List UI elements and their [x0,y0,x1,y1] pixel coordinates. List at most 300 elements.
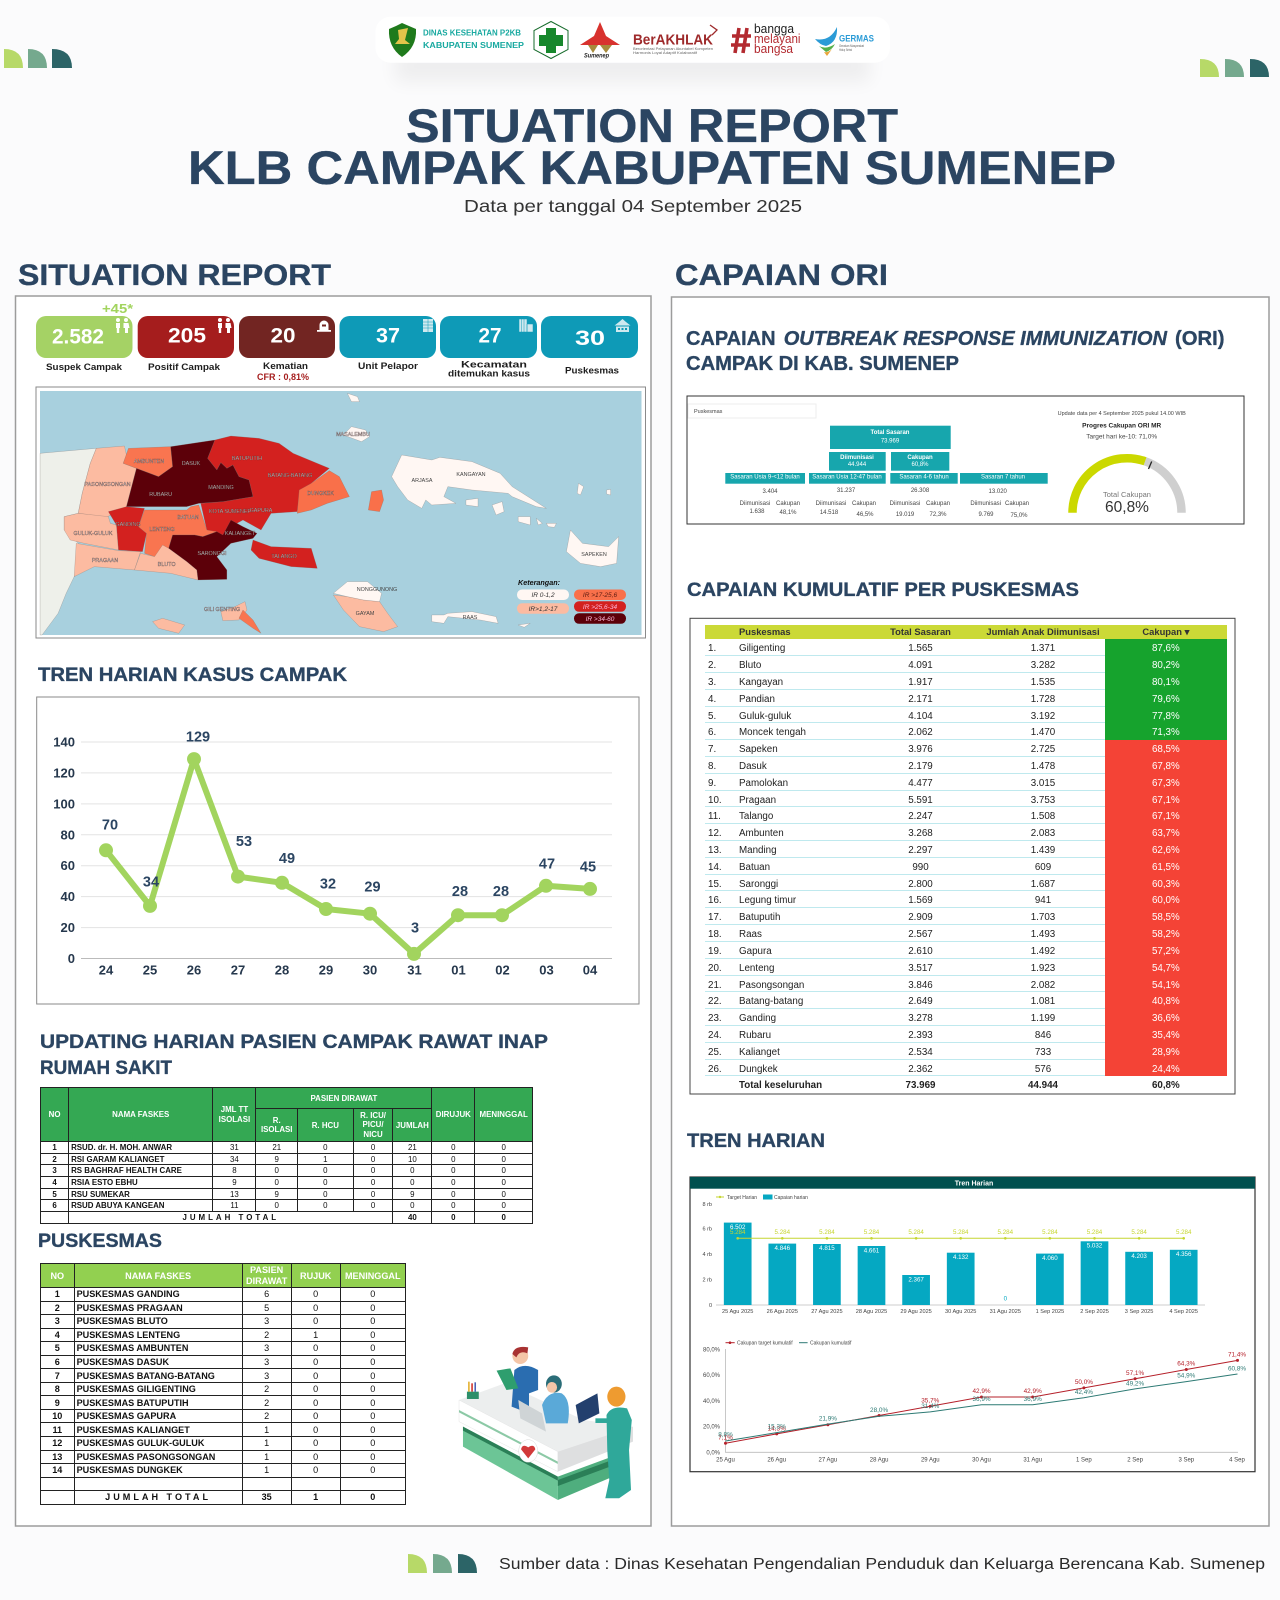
table: cumulative coverage per puskesmas: 5.591 [908,795,933,806]
map: district labels [74,432,607,621]
table: puskesmas patients: 0 [370,1411,375,1421]
table: cumulative coverage per puskesmas: Kalianget [739,1047,780,1058]
chart: x axis: 01 [451,962,466,978]
table: cumulative coverage per puskesmas: 2.171 [908,694,933,705]
chart: data labels: 45 [580,859,596,875]
line series: target kumulatif: 50,0% [1075,1379,1093,1386]
table: puskesmas patients: PUSKESMAS LENTENG [77,1330,180,1340]
table: puskesmas patients: 9 [55,1398,60,1408]
chart: y axis: 60 [61,858,75,873]
dashboard: age group 7 tahun: Diimunisasi [970,501,1001,507]
map: district labels: RAAS [463,615,478,621]
logo: BerAKHLAK [633,25,717,55]
chart: x axis: 26 [187,962,201,978]
bar chart axes: 26 Agu 2025 [767,1309,798,1315]
logo text: Dinas Kesehatan: DINAS KESEHATAN P2KB [423,28,521,38]
heading: situation report: SITUATION REPORT [18,259,331,292]
table: puskesmas patients: 0 [313,1465,318,1475]
table: cumulative coverage per puskesmas: 16. [708,895,722,906]
table: cumulative coverage per puskesmas: 25. [708,1047,722,1058]
table: cumulative coverage per puskesmas: Batuputih [739,912,780,923]
table: hospital inpatient updates: 0 [323,1178,328,1187]
table: hospital inpatient updates: RSU SUMEKAR [71,1190,130,1199]
title [188,100,1116,195]
logo bar shadow [395,50,870,82]
bar chart axes: 28 Agu 2025 [856,1309,887,1315]
line series: target kumulatif: 35,7% [921,1398,940,1404]
line series: cakupan kumulatif: 28,0% [870,1407,888,1414]
logo: bangga melayani bangsa: melayani [754,32,800,46]
table: puskesmas patients: 3 [55,1316,60,1326]
table: cumulative coverage per puskesmas: 1.478 [1031,761,1055,772]
table: cumulative coverage per puskesmas: 18. [708,929,722,940]
dashboard: update note: Progres Cakupan ORI MR [1082,422,1162,430]
line chart: daily measles cases [37,697,639,1004]
table: hospital inpatient updates: 0 [501,1190,506,1199]
table: hospital inpatient updates: 0 [451,1190,456,1199]
table: puskesmas patients: NAMA FASKES [125,1270,191,1280]
map: district labels: BATUPUTIH [232,456,262,462]
line chart axes: 60,0% [703,1373,721,1379]
table: puskesmas patients: PUSKESMAS BATANG-BATANG [77,1371,215,1381]
table: cumulative coverage per puskesmas: 12. [708,828,722,839]
line series: target kumulatif: 42,9% [972,1388,991,1395]
table: hospital inpatient updates: 0 [275,1178,279,1187]
table: cumulative coverage per puskesmas: 2.297 [908,845,933,856]
line chart axes: 27 Agu [819,1458,837,1464]
chart: x axis: 24 [99,962,114,978]
table: cumulative coverage per puskesmas: 941 [1035,895,1051,906]
table: hospital inpatient updates: 0 [371,1190,375,1199]
chart: x axis: 03 [539,962,554,978]
table: hospital inpatient updates: R. ICU/ [360,1111,386,1120]
table: puskesmas patients: 8 [55,1384,60,1394]
table: cumulative coverage per puskesmas: 40,8% [1152,996,1180,1007]
logo: GERMAS [815,27,874,56]
dashboard: puskesmas dropdown [688,404,816,418]
table: cumulative coverage per puskesmas: 990 [912,862,929,873]
KPI: suspek campak: 2.582 [52,326,104,348]
table: cumulative coverage per puskesmas: 10. [708,795,722,806]
bar value labels: 4.203 [1131,1253,1147,1260]
table: puskesmas patients: 5 [55,1343,60,1353]
line chart axes: 1 Sep [1076,1458,1092,1464]
line series: cakupan kumulatif: 31,4% [921,1403,940,1410]
heading: updating harian pasien rawat inap [40,1031,548,1079]
chart: data labels: 3 [411,921,419,937]
table: puskesmas patients: 0 [370,1357,375,1367]
logo: Puskesmas hexagon [534,22,568,58]
table: hospital inpatient updates: 10 [408,1155,417,1164]
dashboard: age group 7 tahun [960,473,1048,519]
chart: y axis: 140 [53,734,75,750]
bar chart axes: 4 rb [703,1252,712,1258]
table: cumulative coverage per puskesmas [705,625,1227,1091]
table: hospital inpatient updates: NAMA FASKES [112,1110,169,1119]
table: cumulative coverage per puskesmas: 3.015 [1031,778,1055,789]
logo text: Dinas Kesehatan: KABUPATEN SUMENEP [423,41,525,50]
map: district labels: LENTENG [149,527,175,533]
table: cumulative coverage per puskesmas: 57,2% [1152,946,1180,957]
line series: cakupan kumulatif: 49,2% [1126,1380,1144,1388]
table: cumulative coverage per puskesmas: 1. [708,643,716,654]
dashboard: age group 4-6 tahun: Sasaran 4-6 tahun [899,474,949,480]
table: hospital inpatient updates: R. HCU [312,1120,339,1130]
chart: y axis: 100 [53,796,75,811]
KPI: positif campak [138,316,234,373]
table: cumulative coverage per puskesmas: 1.508 [1031,811,1055,822]
table: puskesmas patients: 13 [52,1452,62,1462]
dashboard: total sasaran box: Total Sasaran [871,430,910,436]
table: cumulative coverage per puskesmas: Batuan [739,862,770,873]
chart: y axis: 40 [61,889,75,904]
chart: x axis: 30 [363,962,377,978]
table: cumulative coverage per puskesmas: Raas [739,929,762,940]
table: puskesmas patients: PUSKESMAS BATUPUTIH [77,1398,189,1408]
dashboard: total sasaran box: 73.969 [881,438,900,444]
dashboard: age group 9-12 bulan: 1.638 [749,509,765,515]
table: cumulative coverage per puskesmas: 22. [708,996,722,1007]
table: puskesmas patients: PUSKESMAS PASONGSONGAN [77,1452,215,1462]
table: cumulative coverage per puskesmas: 44.944 [1028,1080,1058,1091]
table: hospital inpatient updates: 4 [52,1178,57,1187]
dashboard: update note [1058,411,1186,440]
line chart axes: 26 Agu [767,1458,786,1464]
table: cumulative coverage per puskesmas: 1.199 [1031,1013,1055,1024]
line series: cakupan kumulatif: 54,9% [1177,1372,1196,1380]
table: cumulative coverage per puskesmas: 87,6% [1152,643,1180,654]
table: cumulative coverage per puskesmas: 4.091 [908,660,933,671]
table: puskesmas patients: 0 [370,1371,375,1381]
table: cumulative coverage per puskesmas: 3. [708,677,716,688]
KPI: suspek campak: Suspek Campak [46,362,123,373]
table: puskesmas patients: 3 [264,1357,269,1367]
chart: x axis: 25 [143,962,157,978]
table: puskesmas patients: 0 [313,1438,318,1448]
chart: x axis: 29 [319,962,333,978]
chart: y axis: 20 [61,920,75,935]
table: cumulative coverage per puskesmas: 63,7% [1152,828,1180,839]
dashboard: age group 9-12 bulan: 48,1% [779,510,797,516]
line series: cakupan kumulatif: 15,3% [768,1424,786,1430]
table: hospital inpatient updates: 0 [323,1201,328,1210]
dashboard: update note: Target hari ke-10: 71,0% [1086,434,1157,440]
decoration: top right leaves [1200,59,1269,77]
bar chart axes: 2 rb [703,1278,712,1284]
illustration: monitors [518,1400,546,1432]
table: cumulative coverage per puskesmas: 2.567 [908,929,933,940]
table: hospital inpatient updates: 0 [371,1178,375,1187]
table: puskesmas patients: 1 [264,1452,269,1462]
dashboard: age group 4-6 tahun: Cakupan [926,501,950,507]
illustration: desk front [459,1400,633,1500]
map: district labels: MASALEMBU [336,432,370,438]
table: cumulative coverage per puskesmas: Cakupan ▾ [1142,626,1189,637]
table: hospital inpatient updates: 1 [323,1155,328,1164]
map: district labels: SARONGGI [197,551,227,557]
bar chart legend: Target Harian [727,1195,757,1201]
map: district labels: GULUK-GULUK [74,531,113,537]
frame: cumulative table [690,618,1235,1094]
chart: x axis: 04 [583,962,598,978]
table: cumulative coverage per puskesmas: 1.535 [1031,677,1055,688]
table: puskesmas patients: 0 [370,1316,375,1326]
KPI: unit pelapor: Unit Pelapor [358,361,418,372]
chart: x axis: 31 [407,962,422,978]
table: hospital inpatient updates: 0 [501,1166,506,1175]
line chart axes [703,1348,1245,1464]
dashboard: ORI coverage summary [687,396,1244,524]
table: cumulative coverage per puskesmas: 24. [708,1030,722,1041]
table: cumulative coverage per puskesmas: 35,4% [1152,1030,1180,1041]
table: cumulative coverage per puskesmas: Puskesmas [739,626,791,637]
bar chart axes: 31 Agu 2025 [990,1309,1021,1315]
map: district labels: PRAGAAN [92,558,118,564]
map: district labels: SAPEKEN [581,552,607,558]
table: hospital inpatient updates: 9 [275,1190,279,1199]
table: puskesmas patients: 0 [313,1316,318,1326]
table: cumulative coverage per puskesmas: 68,5% [1152,744,1180,755]
table: cumulative coverage per puskesmas: 1.923 [1031,963,1055,974]
chart: y axis: 80 [61,827,75,842]
heading: capaian ori: CAPAIAN ORI [675,259,888,292]
bar chart axes [703,1202,1205,1315]
map: district labels: BLUTO [158,562,176,568]
table: cumulative coverage per puskesmas: Legung timur [739,895,796,906]
dashboard: age group 9-12 bulan [725,473,805,516]
table: hospital inpatient updates: 21 [408,1143,417,1152]
bar value labels: 0 [1004,1296,1008,1302]
line chart axes: 40,0% [703,1399,721,1405]
table: puskesmas patients: 2 [264,1398,269,1408]
table: cumulative coverage per puskesmas: 24,4% [1152,1064,1180,1075]
bar chart legend: Capaian harian [774,1195,808,1201]
table: cumulative coverage per puskesmas: 36,6% [1152,1013,1180,1024]
table: cumulative coverage per puskesmas: 3.282 [1031,660,1055,671]
target line: 5.284 [1176,1229,1192,1236]
table: hospital inpatient updates: 40 [408,1213,417,1222]
map: district labels: NONGGUNONG [357,587,397,593]
table: cumulative coverage per puskesmas: 67,1% [1152,795,1180,806]
table: hospital inpatient updates: 11 [230,1201,239,1210]
table: puskesmas patients: PUSKESMAS BLUTO [77,1316,168,1326]
table: puskesmas patients: 6 [55,1357,60,1367]
table: cumulative coverage per puskesmas: 3.976 [908,744,933,755]
KPI: kecamatan ditemukan kasus: Kecamatan [461,360,527,370]
dashboard: tren harian charts [690,1177,1255,1472]
bar chart axes: 25 Agu 2025 [722,1309,753,1315]
table: puskesmas patients: 0 [313,1371,318,1381]
table: hospital inpatient updates: JML TT [221,1105,248,1114]
table: hospital inpatient updates: 1 [52,1143,57,1152]
logo: bangga melayani bangsa: bangsa [754,42,793,56]
chart: data labels: 32 [320,877,336,893]
bar chart axes: 1 Sep 2025 [1036,1309,1064,1315]
table: cumulative coverage per puskesmas: 23. [708,1013,722,1024]
map: district labels: GANDING [115,522,141,528]
dashboard: age group 9-12 bulan: Diimunisasi [740,501,770,507]
table: cumulative coverage per puskesmas: Lenteng [739,963,774,974]
chart: data labels [102,730,596,937]
table: cumulative coverage per puskesmas: 3.846 [908,980,933,991]
map: district labels: DUNGKEK [307,491,334,497]
table: hospital inpatient updates: R. [273,1116,281,1125]
table: puskesmas patients: 0 [370,1465,375,1475]
dashboard: coverage gauge [1072,458,1182,516]
line series: target kumulatif: 42,9% [1024,1388,1042,1395]
table: puskesmas patients: PUSKESMAS DUNGKEK [77,1465,183,1475]
table: cumulative coverage per puskesmas: 1.470 [1031,727,1055,738]
bar chart axes: 30 Agu 2025 [945,1309,976,1315]
line chart axes: 0,0% [706,1450,721,1456]
table: puskesmas patients: 4 [55,1330,60,1340]
chart: y axis: 120 [53,765,75,780]
table: cumulative coverage per puskesmas: Giligenting [739,643,785,654]
KPI: unit pelapor [340,316,436,372]
line series: target kumulatif [718,1352,1246,1445]
table: cumulative coverage per puskesmas: 21. [708,980,722,991]
target line: 5.284 [1042,1229,1058,1236]
map: district labels: RUBARU [149,492,172,498]
title: KLB CAMPAK KABUPATEN SUMENEP [188,142,1116,195]
KPI: unit pelapor: 37 [376,324,400,348]
line chart axes: 20,0% [703,1425,721,1431]
table: puskesmas patients: 0 [370,1398,375,1408]
dashboard: diimunisasi box: Diimunisasi [840,455,874,461]
KPI: puskesmas: Puskesmas [565,366,619,376]
dashboard: age group 9-12 bulan: 3.404 [762,489,778,495]
chart: data labels: 29 [364,880,381,896]
table: cumulative coverage per puskesmas: 20. [708,963,722,974]
table: puskesmas patients: PUSKESMAS GANDING [77,1289,180,1299]
table: cumulative coverage per puskesmas: 4. [708,694,716,705]
table: puskesmas patients: 10 [52,1411,62,1421]
line series: cakupan kumulatif: 36,9% [1024,1396,1042,1403]
dashboard: age group 12-47 bulan: Cakupan [852,501,876,507]
chart: x axis: 02 [495,962,510,978]
table: cumulative coverage per puskesmas: 67,1% [1152,811,1180,822]
table: hospital inpatient updates: 0 [501,1213,506,1222]
line chart axes: 25 Agu [716,1458,735,1464]
KPI: kecamatan ditemukan kasus: 27 [478,324,502,348]
line series: target kumulatif: 64,3% [1177,1360,1196,1368]
map: legend: Keterangan: [518,578,560,587]
chart: data labels: 49 [279,851,295,867]
subtitle: report date: Data per tanggal 04 September 2025 [464,196,802,216]
table: cumulative coverage per puskesmas: 54,1% [1152,980,1180,991]
table: puskesmas patients: DIRAWAT [246,1276,287,1286]
table: cumulative coverage per puskesmas: 79,6% [1152,694,1180,705]
chart: y axis: 0 [68,951,75,966]
table: cumulative coverage per puskesmas: 2.362 [908,1064,933,1075]
table: cumulative coverage per puskesmas: 61,5% [1152,862,1180,873]
table: hospital inpatient updates: 0 [501,1143,506,1152]
table: puskesmas patients: 2 [264,1330,269,1340]
bar value labels: 6.502 [730,1224,746,1231]
table: cumulative coverage per puskesmas: Jumlah Anak Diimunisasi [986,626,1100,637]
logo: bangga melayani bangsa: bangga [754,22,794,36]
table: cumulative coverage per puskesmas: 1.565 [908,643,933,654]
table: hospital inpatient updates: 0 [451,1166,456,1175]
heading: updating harian pasien rawat inap: UPDATING HARIAN PASIEN CAMPAK RAWAT INAP [40,1031,548,1053]
dashboard: age group 4-6 tahun: 19.019 [896,512,915,518]
dashboard: age group 4-6 tahun: Diimunisasi [890,501,920,507]
map: district labels: ARJASA [412,478,433,484]
table: cumulative coverage per puskesmas: Bluto [739,660,761,671]
table: cumulative coverage per puskesmas: 28,9% [1152,1047,1180,1058]
table: puskesmas patients: 2 [264,1384,269,1394]
map: district labels: GAPURA [250,508,273,514]
table: cumulative coverage per puskesmas: 60,0% [1152,895,1180,906]
table: cumulative coverage per puskesmas: 6. [708,727,716,738]
heading: capaian ori campak: OUTBREAK RESPONSE IMMUNIZATION [784,327,1168,350]
chart: x axis: 27 [231,962,245,978]
line series: cakupan kumulatif [718,1366,1246,1441]
table: puskesmas patients: PUSKESMAS GILIGENTING [77,1384,196,1394]
line series: target kumulatif: 57,1% [1126,1370,1144,1377]
KPI: suspek campak [36,302,133,373]
logo text: Dinas Kesehatan [423,28,525,50]
table: cumulative coverage per puskesmas: 2.725 [1031,744,1055,755]
table: cumulative coverage per puskesmas: 1.492 [1031,946,1055,957]
table: puskesmas patients: 0 [370,1289,375,1299]
target line: 5.284 [864,1229,880,1236]
chart: data labels: 70 [102,818,118,834]
table: puskesmas patients: 0 [370,1384,375,1394]
heading: capaian kumulatif per puskesmas: CAPAIAN KUMULATIF PER PUSKESMAS [687,579,1079,601]
table: cumulative coverage per puskesmas: Ambunten [739,828,784,839]
table: cumulative coverage per puskesmas: Moncek tengah [739,727,806,738]
table: cumulative coverage per puskesmas: Manding [739,845,777,856]
table: hospital inpatient updates: 8 [232,1166,237,1175]
illustration: seated nurse [542,1375,569,1423]
illustration: medical reception desk with staff [459,1347,633,1500]
table: hospital inpatient updates: 0 [451,1201,456,1210]
line series: target kumulatif: 14,3% [768,1426,786,1432]
table: cumulative coverage per puskesmas: 1.371 [1031,643,1055,654]
heading: updating harian pasien rawat inap: RUMAH SAKIT [40,1057,172,1079]
map: legend: IR >34-60 [586,616,615,623]
map: district labels: KOTA SUMENEP [209,509,251,515]
table: cumulative coverage per puskesmas: Pragaan [739,795,776,806]
bar chart axes: 3 Sep 2025 [1125,1309,1153,1315]
table: puskesmas patients: 0 [370,1303,375,1313]
table: puskesmas patients: 5 [264,1303,269,1313]
table: cumulative coverage per puskesmas: 1.703 [1031,912,1055,923]
table: hospital inpatient updates: 9 [410,1190,415,1199]
chart: data labels: 28 [493,884,509,900]
table: puskesmas patients: 14 [52,1465,62,1475]
dashboard: age group 4-6 tahun: 72,3% [929,512,947,518]
table: cumulative coverage per puskesmas: Batang-batang [739,996,803,1007]
target line: 5.284 [775,1229,791,1236]
table: puskesmas patients: 0 [313,1384,318,1394]
table: hospital inpatient updates: 0 [410,1201,415,1210]
dashboard: total sasaran box [830,426,951,449]
bar chart axes: 2 Sep 2025 [1080,1309,1109,1315]
map: district labels: BATANG-BATANG [268,473,312,479]
table: cumulative coverage per puskesmas: 2.534 [908,1047,933,1058]
table: hospital inpatient updates: JUMLAH [396,1120,429,1130]
table: puskesmas patients: 2 [264,1411,269,1421]
map: district labels: GAYAM [356,611,375,617]
table: puskesmas patients: PUSKESMAS DASUK [77,1357,169,1367]
table: cumulative coverage per puskesmas: 1.917 [908,677,933,688]
line chart axes: 2 Sep [1127,1458,1144,1464]
table: cumulative coverage per puskesmas: 58,5% [1152,912,1180,923]
table: hospital inpatient updates: 0 [410,1166,415,1175]
chart: data labels: 34 [143,875,159,891]
